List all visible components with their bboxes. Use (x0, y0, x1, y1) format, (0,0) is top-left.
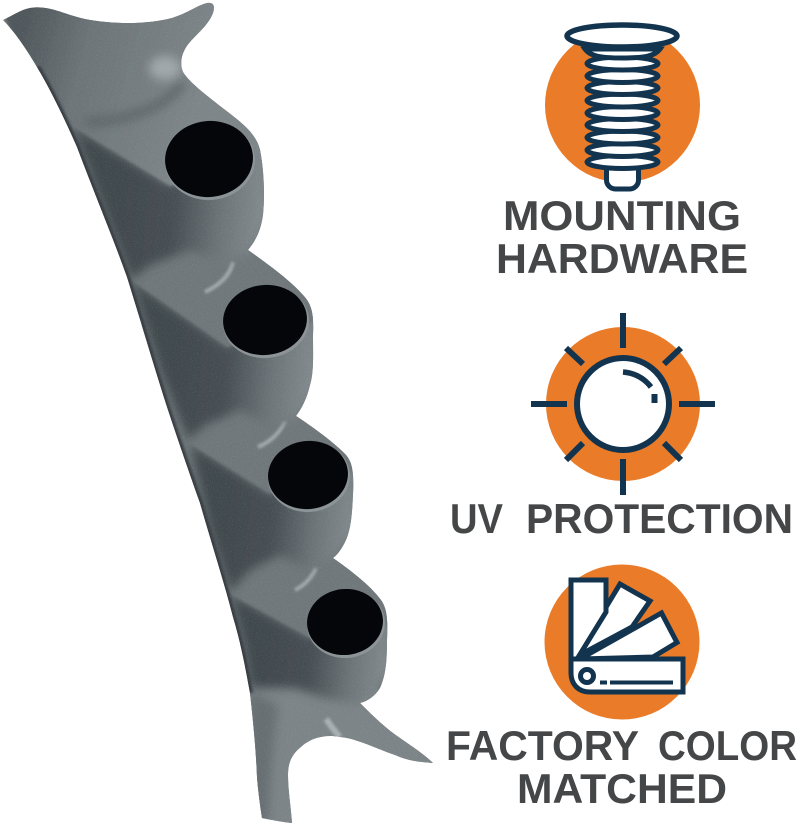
icon: screw on orange circle (545, 25, 700, 189)
gauge hole 2 (219, 281, 313, 362)
heading: mounting hardware: MOUNTING (503, 192, 741, 239)
heading: factory color matched: FACTORY (446, 722, 639, 769)
plate 4 (218, 530, 392, 638)
icon: sun with lens on orange circle (531, 313, 715, 495)
heading: UV protection: UV (450, 495, 503, 542)
gauge hole 4 (304, 585, 388, 662)
feature: UV protection (450, 313, 793, 542)
pillar body (0, 0, 440, 828)
lower foot (245, 680, 440, 828)
heading: factory color matched: MATCHED (517, 765, 727, 812)
heading: mounting hardware (496, 192, 748, 282)
gauge hole 1 (161, 117, 259, 204)
icon: color swatch fan on orange circle (544, 564, 700, 720)
left edge shadow (37, 67, 250, 693)
cylinder and facet 2 (131, 280, 320, 440)
feature: factory color matched (446, 564, 797, 812)
top section (0, 0, 265, 186)
surface grain (0, 0, 440, 828)
gauge hole 3 (265, 437, 353, 516)
heading: mounting hardware: HARDWARE (496, 235, 748, 282)
product photo: four-gauge pillar pod (0, 0, 440, 828)
cylinder and facet 1 (72, 126, 270, 280)
plate 3 (194, 392, 353, 494)
cylinder and facet 3 (190, 444, 358, 592)
plate 2 (136, 230, 313, 348)
feature: mounting hardware (496, 25, 748, 282)
heading: UV protection: PROTECTION (526, 495, 793, 542)
heading: factory color matched (446, 722, 797, 812)
cylinder and facet 4 (230, 594, 392, 705)
